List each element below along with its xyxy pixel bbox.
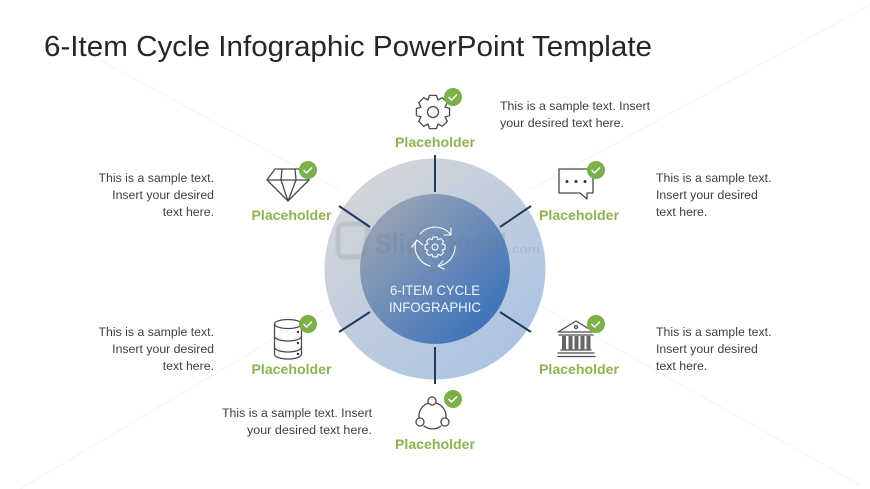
- label: Placeholder: [252, 207, 332, 223]
- label: Placeholder: [539, 207, 620, 223]
- text block: This is a sample text.: [656, 171, 772, 185]
- text block: text here.: [163, 359, 214, 373]
- label: Placeholder: [395, 134, 476, 150]
- icon: speech bubble: [559, 169, 593, 199]
- outer ring: [324, 158, 546, 380]
- icon: connected nodes: [416, 397, 449, 429]
- text block: Insert your desired: [112, 342, 214, 356]
- label: Placeholder: [252, 361, 332, 377]
- badge: check: [444, 390, 462, 408]
- badge: check: [299, 315, 317, 333]
- item: speech bubble: [539, 161, 772, 223]
- watermark: [338, 224, 540, 259]
- text block: Insert your desired: [656, 342, 758, 356]
- text block: Insert your desired: [656, 188, 758, 202]
- item: database: [98, 315, 332, 377]
- label: Placeholder: [539, 361, 620, 377]
- central cycle diagram: INFOGRAPHIC: [389, 299, 481, 315]
- item: top gear: [395, 88, 651, 150]
- text block: This is a sample text.: [98, 171, 214, 185]
- badge: check: [587, 315, 605, 333]
- icon: diamond: [267, 169, 309, 201]
- icon: bank: [558, 321, 595, 356]
- icon: database: [274, 320, 302, 359]
- text block: This is a sample text.: [98, 325, 214, 339]
- inner circle: [360, 194, 510, 344]
- title: 6-Item Cycle Infographic PowerPoint Template: [44, 31, 652, 63]
- badge: check: [444, 88, 462, 106]
- text block: text here.: [163, 205, 214, 219]
- text block: your desired text here.: [500, 116, 624, 130]
- badge: check: [299, 161, 317, 179]
- item: bottom nodes: [222, 390, 476, 452]
- central cycle diagram: [324, 155, 546, 384]
- text block: text here.: [656, 359, 707, 373]
- icon: gear: [416, 95, 450, 129]
- center label: 6-ITEM CYCLE: [390, 282, 480, 298]
- watermark: .com: [508, 244, 540, 256]
- text block: text here.: [656, 205, 707, 219]
- label: Placeholder: [395, 436, 476, 452]
- badge: check: [587, 161, 605, 179]
- icon: cycle gear: [412, 227, 455, 269]
- item: bank: [539, 315, 772, 377]
- watermark: SlideModel: [375, 228, 507, 259]
- text block: your desired text here.: [247, 423, 372, 437]
- text block: This is a sample text. Insert: [222, 406, 373, 420]
- text block: Insert your desired: [112, 188, 214, 202]
- text block: This is a sample text. Insert: [500, 99, 651, 113]
- connector spokes: [339, 155, 531, 384]
- text block: This is a sample text.: [656, 325, 772, 339]
- item: diamond: [98, 161, 332, 223]
